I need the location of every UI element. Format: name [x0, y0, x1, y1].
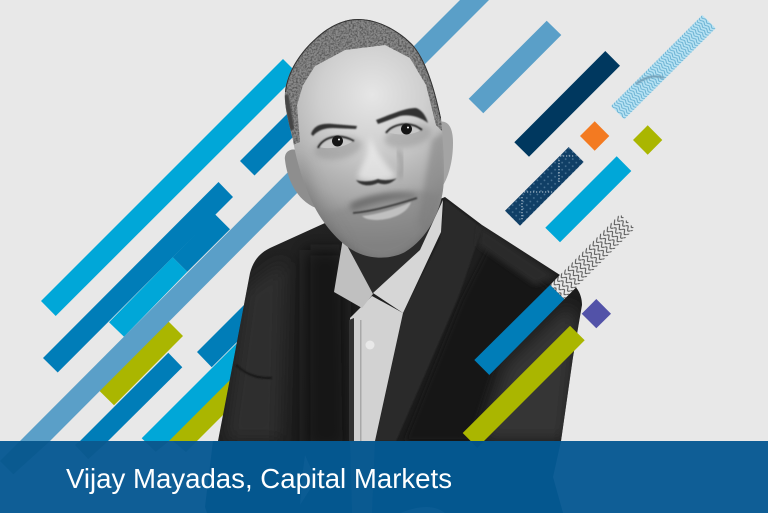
shirt buttons	[366, 340, 374, 350]
right ear	[438, 122, 453, 190]
shirt placket	[350, 296, 403, 441]
bars: left cluster	[20, 59, 340, 441]
bars: right cluster	[371, 0, 716, 328]
brow right	[376, 108, 428, 124]
bar: cyan lower	[142, 320, 290, 441]
stubble	[346, 190, 424, 258]
bars over jacket	[463, 214, 635, 441]
bar: light blue upper right	[469, 21, 561, 113]
bar: lime over sleeve	[463, 326, 585, 441]
diamond: orange	[580, 121, 609, 151]
bar: dotted navy	[505, 147, 584, 226]
collar right	[373, 200, 443, 313]
bar: cyan right	[545, 156, 631, 242]
brow left	[311, 124, 357, 136]
left eye socket shadow	[314, 134, 363, 160]
bar: lime behind jacket	[167, 363, 275, 441]
moustache	[350, 193, 416, 211]
bar: light blue behind head	[371, 0, 489, 89]
jacket	[218, 197, 582, 450]
mouth	[353, 198, 417, 220]
bar: blue short by head	[240, 110, 305, 176]
portrait of Vijay Mayadas	[218, 12, 582, 450]
collar left	[334, 238, 373, 308]
nose	[356, 135, 402, 185]
bar: cyan long top	[41, 59, 298, 316]
shirt	[334, 200, 443, 441]
bar: wave pattern light blue	[611, 15, 716, 119]
diamond: lime	[633, 125, 662, 155]
bar: chevron pattern	[550, 214, 635, 299]
bar: blue behind jacket	[197, 294, 270, 367]
bar: cyan under blue	[109, 257, 187, 337]
bar: blue lower left	[80, 353, 182, 441]
bar: light blue diagonal	[20, 150, 340, 441]
caption banner	[0, 441, 768, 513]
bar: blue over shoulder	[474, 285, 564, 375]
hair	[284, 19, 442, 144]
diamond: purple	[582, 299, 611, 328]
neck	[340, 200, 443, 295]
person silhouette through banner	[205, 441, 563, 513]
bar: blue segment	[173, 214, 230, 272]
bar tails through banner	[0, 441, 50, 474]
bar: navy	[514, 51, 620, 157]
bar: lime left	[99, 321, 183, 405]
right eye socket shadow	[383, 122, 432, 149]
head	[284, 19, 444, 258]
bar: blue long	[43, 182, 233, 372]
left ear	[285, 149, 316, 208]
eye left	[318, 136, 354, 148]
eye right	[386, 124, 422, 134]
caption text: Vijay Mayadas, Capital Markets	[66, 463, 452, 494]
